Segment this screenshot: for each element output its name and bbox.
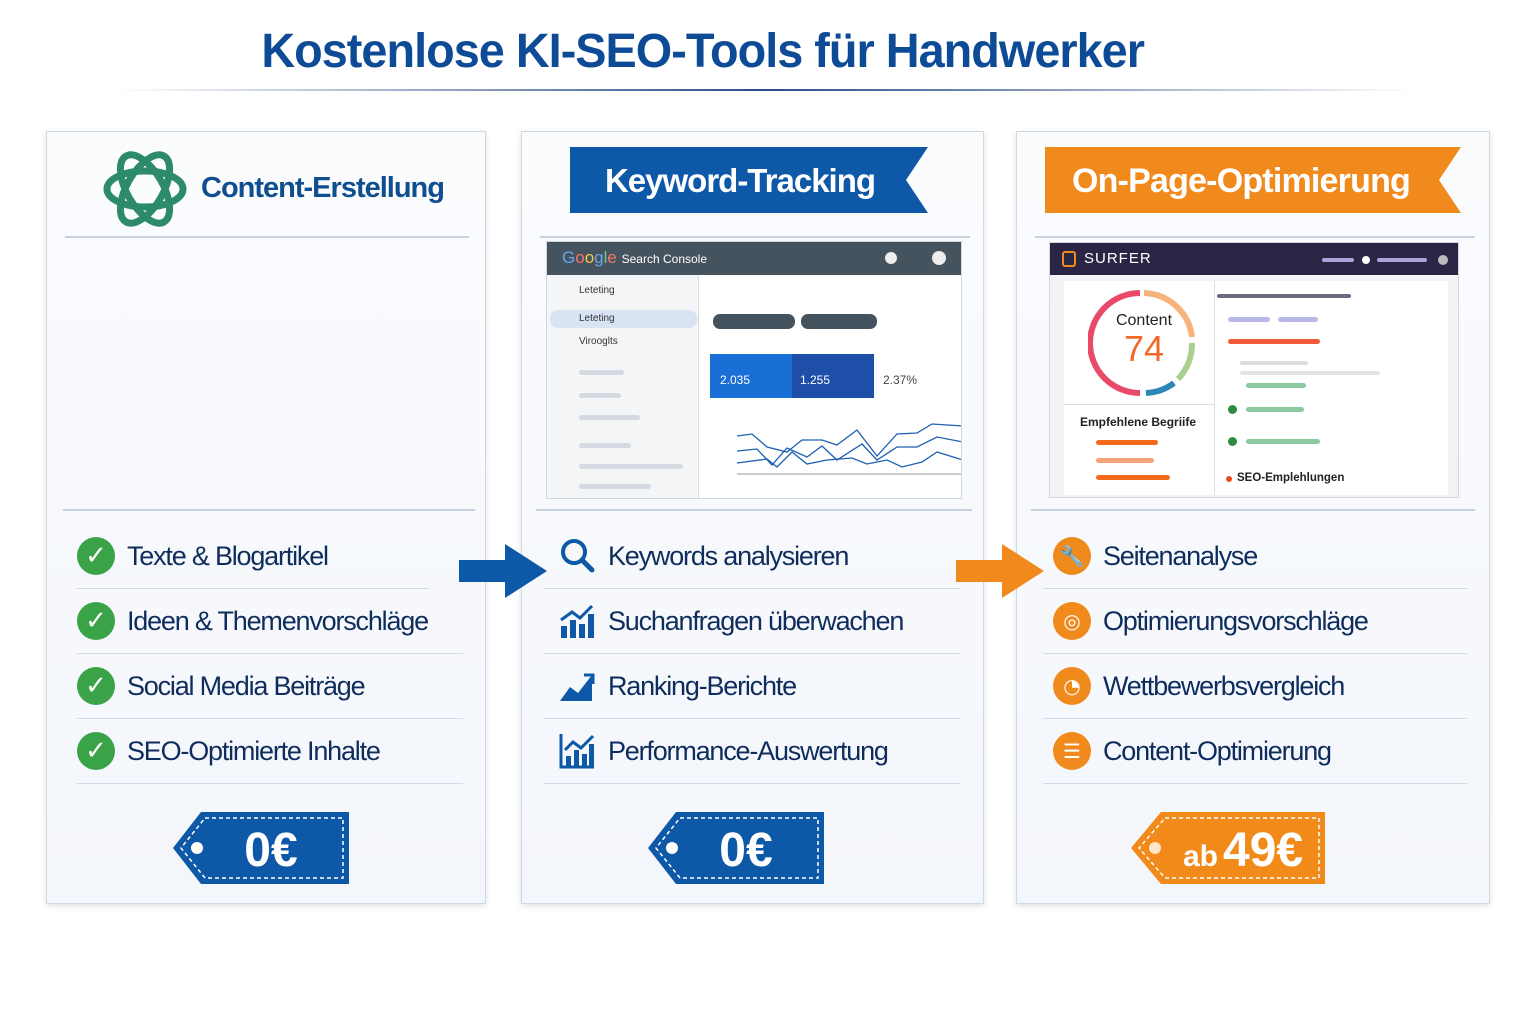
panel: on-page optimization (1016, 131, 1490, 904)
screenshot: search console (546, 241, 962, 499)
list: ✓ (85, 541, 107, 571)
screenshot: surfer: Empfehlene Begriife (1080, 415, 1196, 429)
screenshot: surfer: SURFER (1084, 250, 1152, 267)
price tag: 49€ (1223, 824, 1303, 877)
list: ◔ (1063, 674, 1081, 698)
screenshot: surfer: SEO-Emplehlungen (1237, 472, 1344, 484)
list: Suchanfragen überwachen (608, 606, 903, 636)
arrow 2 (956, 544, 1044, 598)
banner (1045, 147, 1461, 213)
screenshot: search console: Virooglts (579, 336, 618, 347)
title: Kostenlose KI-SEO-Tools für Handwerker (262, 25, 1144, 78)
list: Texte & Blogartikel (127, 540, 328, 570)
list: Optimierungsvorschläge (1103, 606, 1368, 636)
screenshot: surfer: Content (1116, 312, 1173, 329)
screenshot: search console: Leteting (579, 313, 615, 324)
list: Keywords analysieren (608, 540, 848, 570)
arrow 1 (459, 544, 547, 598)
list: ☰ (1063, 739, 1081, 763)
list: Content-Optimierung (1103, 736, 1331, 766)
heading: Content-Erstellung (201, 172, 444, 204)
panel: content creation (46, 131, 486, 904)
list: Wettbewerbsvergleich (1103, 670, 1344, 700)
banner: On-Page-Optimierung (1072, 162, 1410, 200)
list: Ideen & Themenvorschläge (127, 606, 428, 636)
list: Performance-Auswertung (608, 736, 888, 766)
screenshot: surfer (1049, 242, 1459, 498)
banner: Keyword-Tracking (605, 162, 875, 199)
list: ◎ (1063, 609, 1081, 633)
price tag (1131, 812, 1325, 884)
icon: openai logo (104, 151, 186, 227)
list: SEO-Optimierte Inhalte (127, 736, 380, 766)
list: Social Media Beiträge (127, 670, 364, 700)
banner (570, 147, 928, 213)
list: 🔧 (1060, 544, 1084, 568)
screenshot: search console: 1.255 (800, 373, 830, 387)
screenshot: search console: Leteting (579, 285, 615, 296)
list: Seitenanalyse (1103, 540, 1257, 570)
price tag (648, 812, 824, 884)
list (544, 539, 960, 784)
screenshot: search console: 2.37% (883, 373, 917, 387)
list: ✓ (85, 606, 107, 636)
list: Ranking-Berichte (608, 670, 796, 700)
list (77, 537, 463, 784)
list (1043, 537, 1467, 784)
price tag: 0€ (244, 824, 298, 877)
price tag: 0€ (719, 824, 773, 877)
price tag (173, 812, 349, 884)
price tag: ab (1183, 840, 1218, 873)
screenshot: search console: 2.035 (720, 373, 750, 387)
list: ✓ (85, 736, 107, 766)
screenshot: search console: Google Search Console (562, 248, 707, 267)
panel: keyword tracking (521, 131, 984, 904)
list: ✓ (85, 671, 107, 701)
screenshot: surfer: 74 (1124, 328, 1164, 369)
